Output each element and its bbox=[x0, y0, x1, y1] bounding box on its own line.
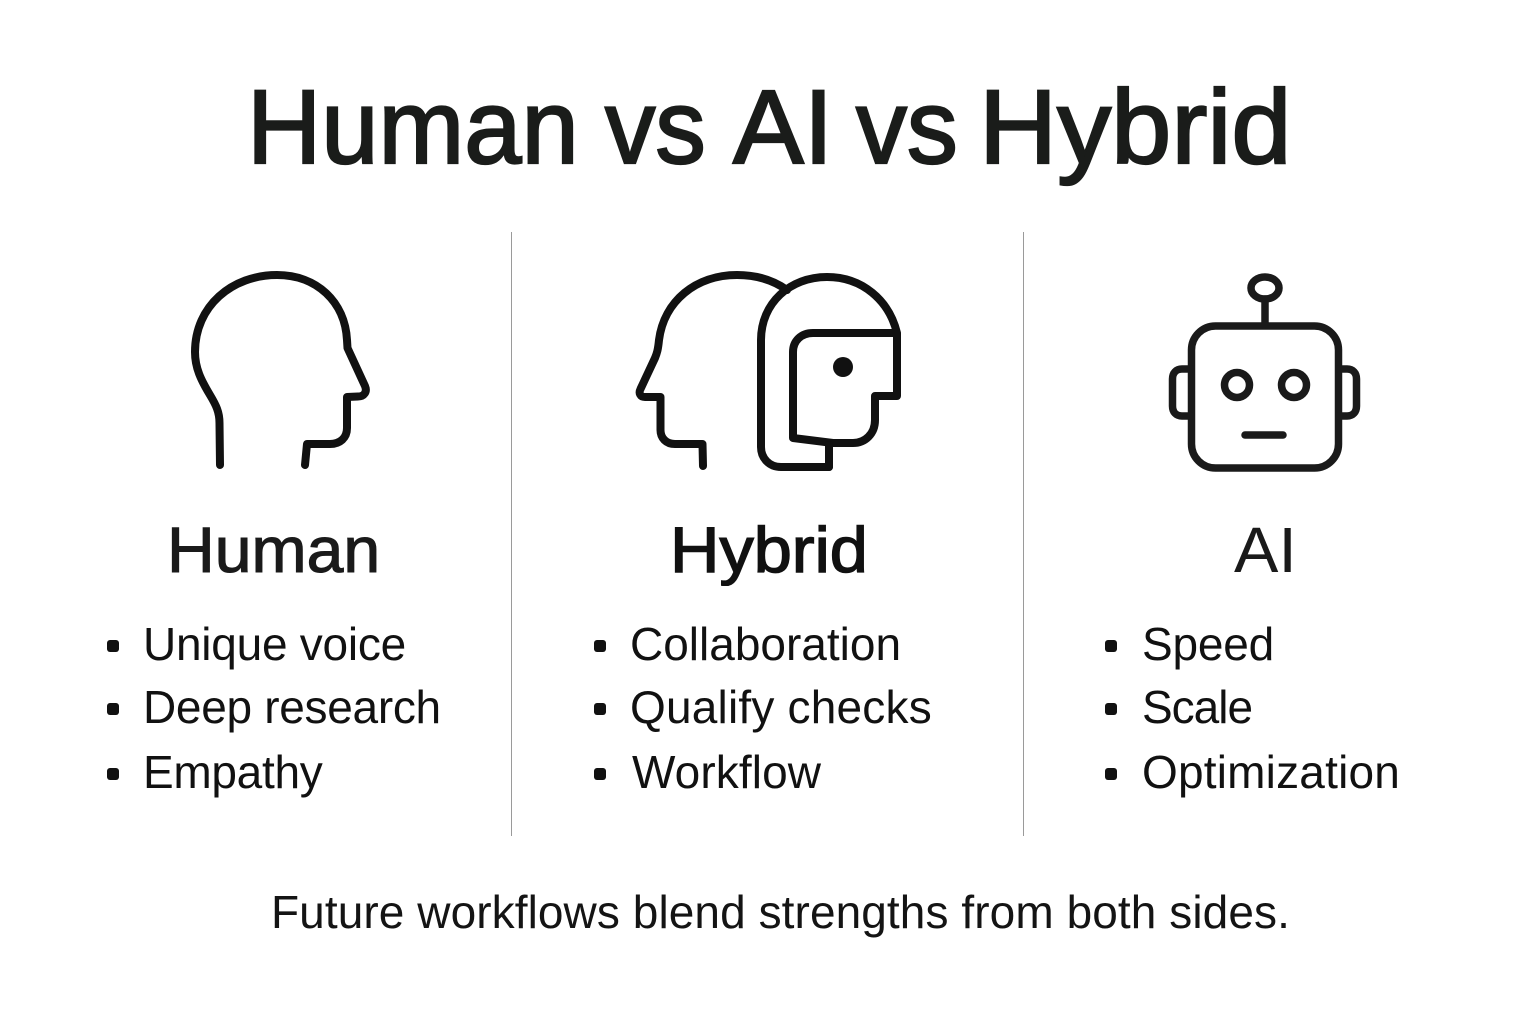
icon: robot bbox=[1168, 273, 1360, 472]
list: AI strengths: Speed bbox=[1142, 618, 1274, 670]
list: human strengths: Unique voice bbox=[143, 618, 406, 670]
title: vs bbox=[605, 69, 706, 186]
title: Hybrid bbox=[979, 69, 1292, 186]
list: human strengths bbox=[107, 618, 441, 798]
title bbox=[247, 69, 1292, 186]
list: AI strengths: Scale bbox=[1142, 681, 1252, 733]
list: AI strengths bbox=[1105, 618, 1400, 798]
divider left bbox=[511, 232, 512, 836]
list: AI strengths: Optimization bbox=[1142, 746, 1400, 798]
title: vs bbox=[856, 69, 957, 186]
list: hybrid strengths bbox=[594, 618, 932, 798]
title: AI bbox=[733, 69, 833, 186]
list: hybrid strengths: Qualify checks bbox=[630, 681, 932, 733]
icon: human head bbox=[191, 271, 370, 469]
heading: Human: Human bbox=[167, 514, 380, 586]
hybrid eye bbox=[833, 357, 853, 377]
list: human strengths: Empathy bbox=[143, 746, 322, 798]
divider right bbox=[1023, 232, 1024, 836]
list: hybrid strengths: Workflow bbox=[632, 746, 821, 798]
icon: hybrid head bbox=[636, 271, 901, 471]
footer caption: Future workflows blend strengths from both sides. bbox=[271, 886, 1290, 938]
list: hybrid strengths: Collaboration bbox=[630, 618, 901, 670]
heading: Hybrid: Hybrid bbox=[670, 514, 868, 586]
heading: AI: AI bbox=[1234, 514, 1297, 586]
title: Human bbox=[247, 69, 579, 186]
list: human strengths: Deep research bbox=[143, 681, 441, 733]
